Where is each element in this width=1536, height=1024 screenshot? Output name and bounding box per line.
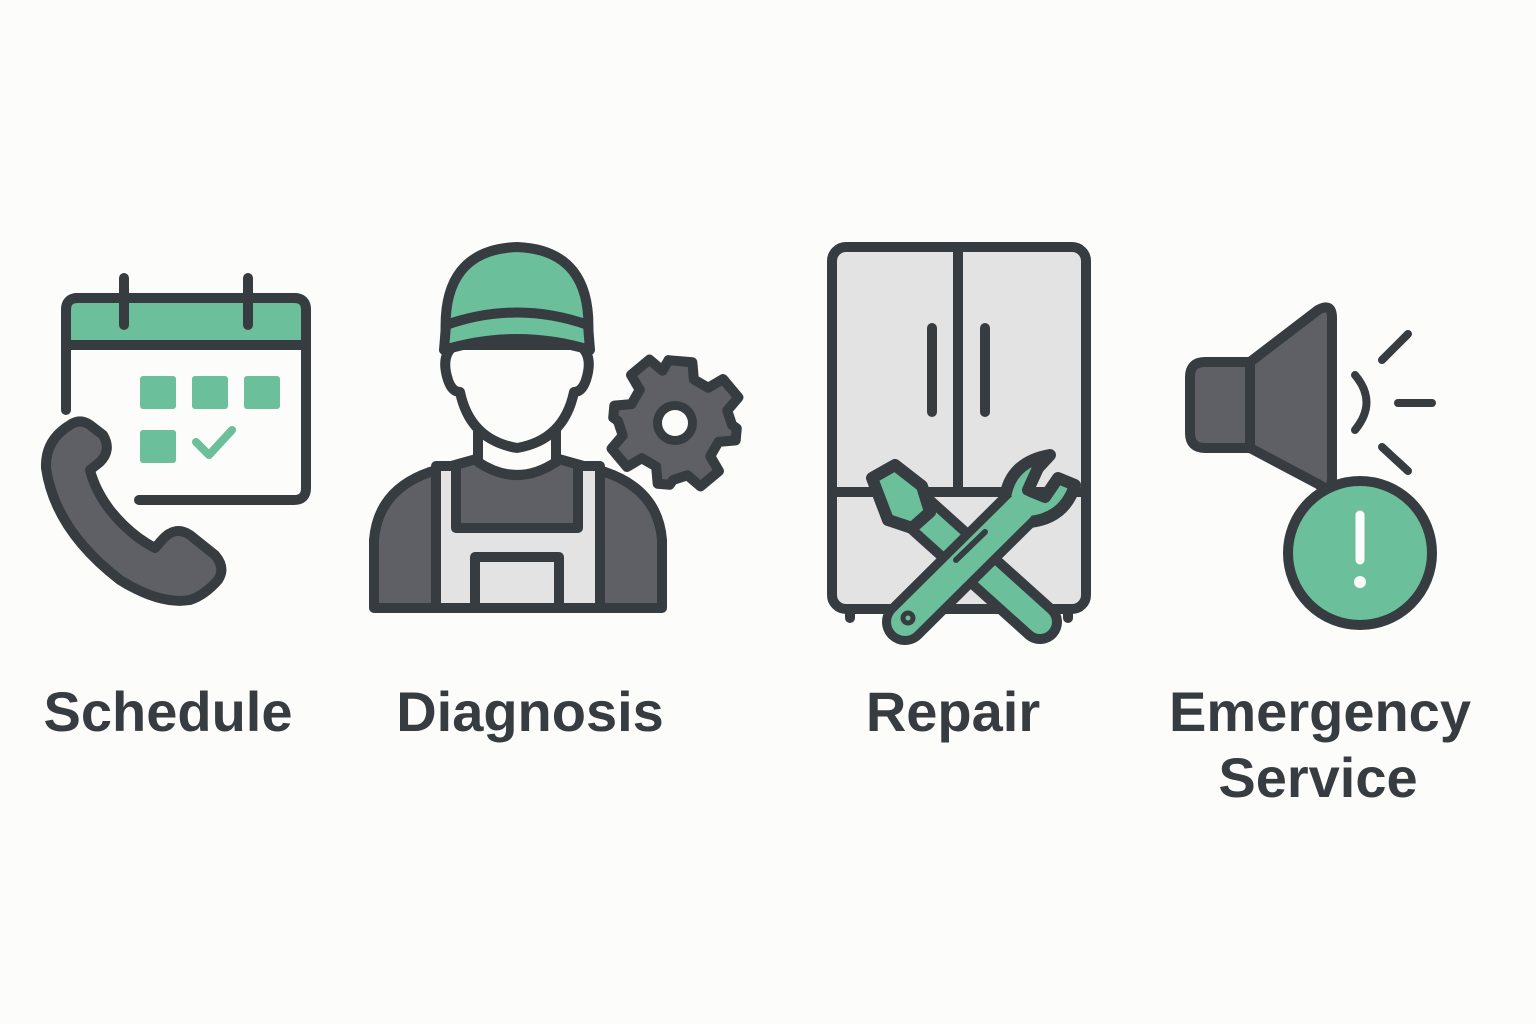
- wrench: [903, 455, 1075, 623]
- phone handset: [46, 422, 221, 601]
- icon: speaker with alert (emergency): [1190, 307, 1432, 625]
- label: Schedule: Schedule: [44, 680, 292, 743]
- icon: fridge with tools (repair): [832, 247, 1086, 623]
- gear: [608, 356, 742, 490]
- icon: calendar with phone (schedule): [46, 278, 306, 601]
- icon: technician with gear (diagnosis): [374, 247, 742, 608]
- label: Repair: Repair: [866, 680, 1040, 743]
- label: Emergency Service: Emergency: [1169, 680, 1471, 743]
- screwdriver: [872, 465, 1040, 622]
- label: Diagnosis: Diagnosis: [396, 680, 664, 743]
- label: Emergency Service: Service: [1218, 746, 1418, 809]
